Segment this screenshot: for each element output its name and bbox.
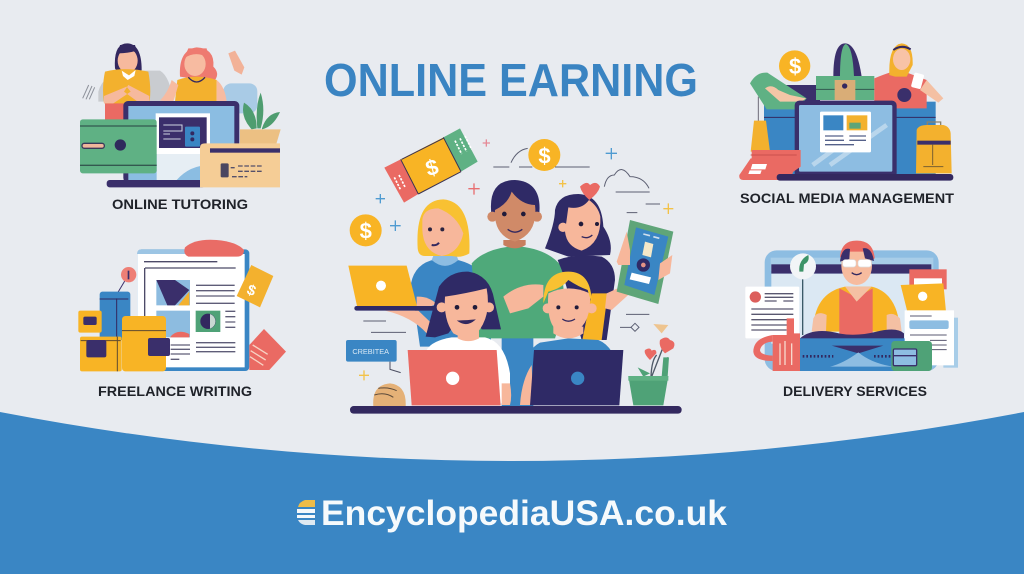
icon: left dollar coin: [350, 214, 382, 246]
icon: left dollar coin: $: [360, 219, 372, 244]
panel: social media management: [739, 43, 954, 206]
icon: bun: [373, 383, 406, 406]
icon: dollar ticket: [384, 128, 478, 203]
sign: crebitea: CREBITEA: [352, 347, 389, 356]
icon: dollar ticket: $: [423, 154, 441, 181]
icon: flower pot: [628, 324, 674, 405]
footer band: [0, 412, 1024, 574]
illustration: freelance writing: $: [244, 282, 258, 300]
person: front girl: [426, 272, 511, 405]
logo text: EncyclopediaUSA.co.uk: [321, 494, 728, 533]
illustration: social media management: $: [789, 54, 801, 79]
person: right woman with phone: [545, 183, 673, 340]
panel: freelance writing: [78, 240, 286, 399]
label: delivery services: DELIVERY SERVICES: [783, 383, 927, 399]
icon: yellow laptop: [348, 266, 438, 333]
sign: crebitea: [346, 340, 401, 373]
illustration: social media management: [739, 43, 953, 181]
decorative sparkles and clouds: [359, 139, 673, 380]
logo: encyclopediausa: [297, 494, 728, 533]
illustration: freelance writing: [78, 240, 286, 371]
panel: central team illustration: [346, 128, 682, 414]
person: back left blonde woman: [411, 199, 492, 347]
icon: coral laptop: [408, 350, 501, 405]
icon: striped logo mark: [297, 500, 315, 525]
illustration: delivery services: [745, 241, 958, 371]
icon: top dollar coin: $: [538, 143, 551, 168]
title: ONLINE EARNING: [324, 54, 698, 106]
panel: online tutoring: [80, 43, 281, 212]
label: social media management: SOCIAL MEDIA MANAGEMENT: [740, 190, 954, 206]
label: freelance writing: FREELANCE WRITING: [98, 383, 252, 399]
illustration: online tutoring: [80, 43, 281, 187]
panel: delivery services: [745, 241, 958, 399]
table: [350, 406, 682, 414]
person: center man: [472, 180, 565, 407]
label: online tutoring: ONLINE TUTORING: [112, 196, 248, 212]
person: front boy: [520, 272, 612, 405]
icon: dark laptop: [530, 350, 623, 405]
icon: top dollar coin: [528, 139, 560, 171]
person: center man's hand: [503, 284, 543, 313]
